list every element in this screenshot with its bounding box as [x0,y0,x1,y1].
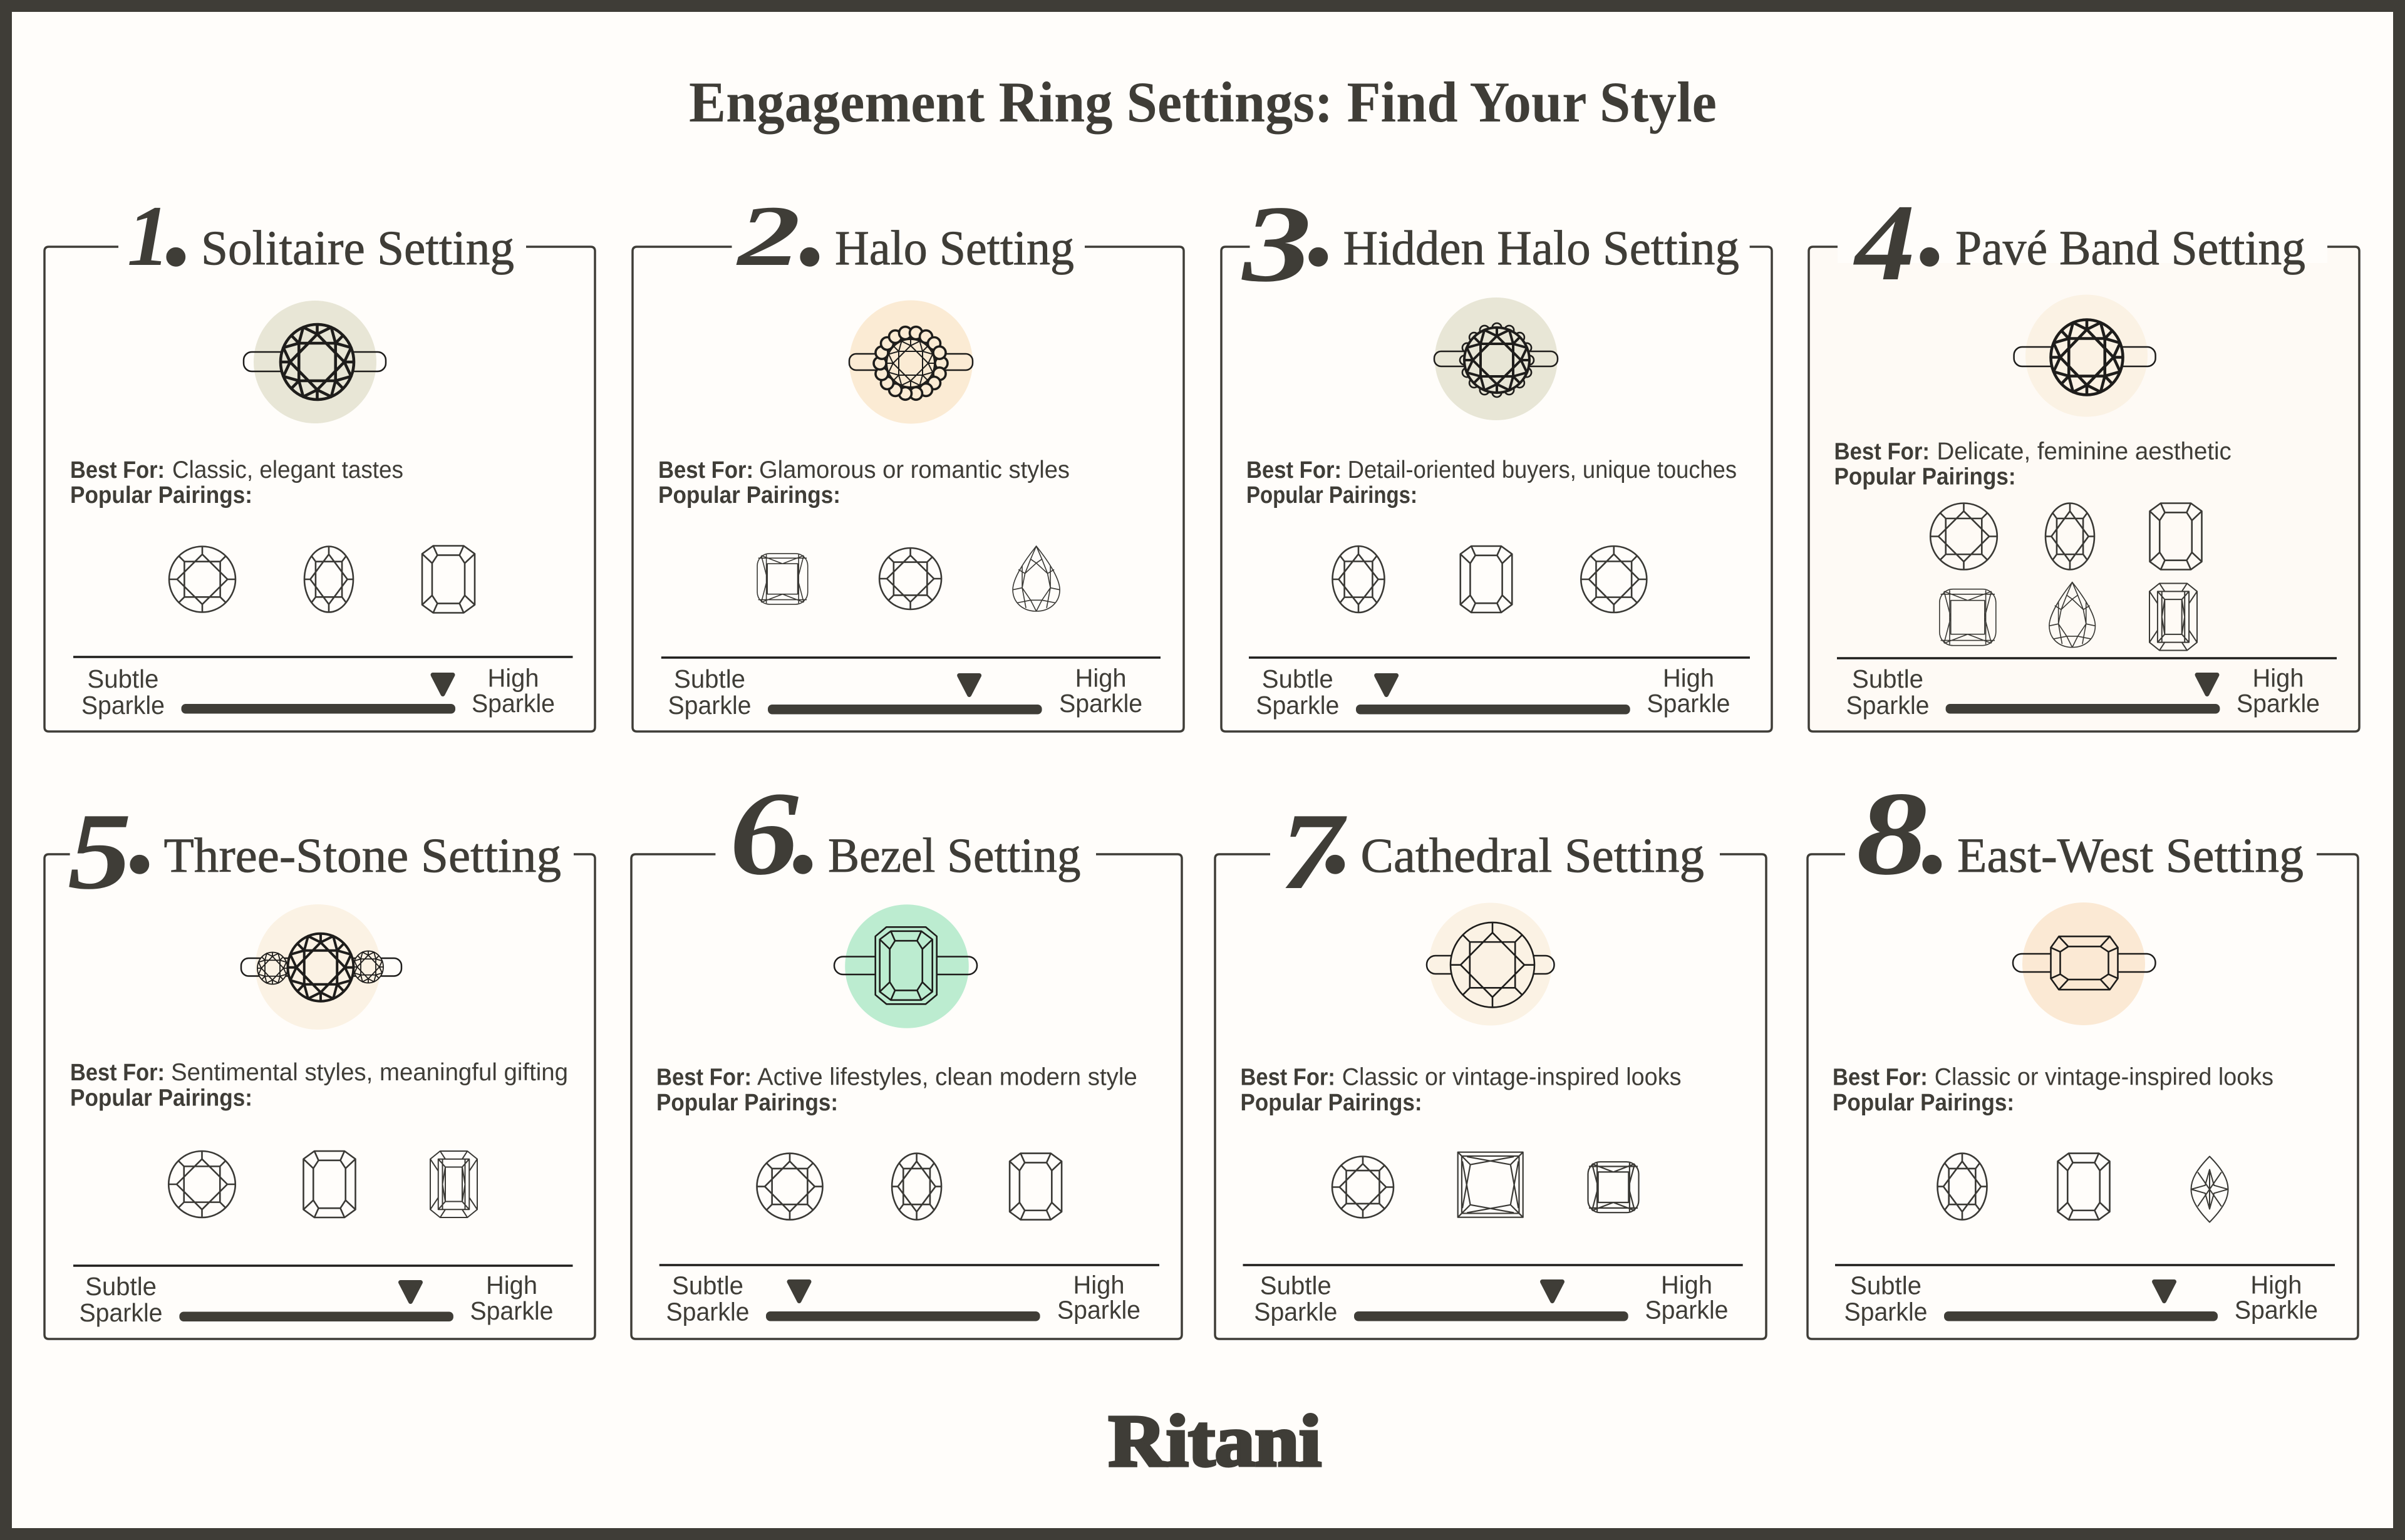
panel border [631,854,1182,1339]
sparkle scale: High [1075,664,1127,693]
number 1 [127,160,195,291]
sparkle scale: Sparkle [1256,691,1339,720]
panel border [1221,247,1772,731]
panel: bezel setting [631,767,1182,1339]
best for text: Best For: [656,1064,752,1090]
panel border [1808,854,2358,1339]
heading: Pavé Band Setting [1955,220,2305,275]
number 8 [1856,767,1952,900]
number 6: . [792,767,822,899]
best for text: Popular Pairings: [1833,1090,2014,1116]
number 6 [730,767,822,900]
best for text: Sentimental styles, meaningful gifting [171,1059,568,1086]
best for text: Detail-oriented buyers, unique touches [1348,457,1737,483]
sparkle scale: Sparkle [1645,1296,1729,1325]
best for text [1246,457,1737,509]
ring illustration [1427,903,1554,1026]
sparkle scale: Sparkle [472,689,555,718]
best for text: Popular Pairings: [70,1085,252,1111]
ring illustration [2013,902,2156,1025]
sparkle scale: Sparkle [1059,689,1142,718]
pairing icons [757,1154,1062,1220]
ring illustration [834,904,977,1028]
ring illustration [2014,294,2156,417]
best for text [656,1063,1137,1116]
sparkle scale: Sparkle [668,691,752,720]
divider [73,656,572,658]
sparkle scale: Sparkle [1254,1298,1337,1326]
number 2: 2 [736,188,800,284]
panel: solitaire setting [44,160,595,731]
panel: pave band setting [1809,160,2359,731]
sparkle scale [668,664,1142,720]
best for text: Best For: [70,1060,165,1086]
panel: east-west setting [1808,767,2358,1339]
best for text: Popular Pairings: [1240,1090,1422,1116]
best for text: Delicate, feminine aesthetic [1937,438,2232,465]
sparkle scale: High [487,664,539,693]
best for text [1834,438,2232,490]
sparkle scale [1846,664,2320,720]
number 5: 5 [68,790,132,912]
sparkle scale: Sparkle [2237,689,2320,718]
best for text: Best For: [1833,1064,1928,1090]
sparkle scale: High [2252,664,2304,693]
heading: Halo Setting [835,220,1074,275]
pairing icons [757,546,1060,611]
divider [661,656,1161,659]
number 7: . [1325,767,1354,899]
number 7: 7 [1280,790,1347,912]
best for text: Best For: [70,457,165,483]
panel border [633,247,1184,731]
sparkle scale: Subtle [1262,664,1333,693]
best for text: Popular Pairings: [1834,464,2015,490]
divider [1837,657,2337,659]
sparkle scale: Sparkle [1647,689,1730,718]
sparkle scale: Subtle [672,1271,743,1300]
best for text: Popular Pairings: [658,482,840,509]
sparkle scale: Subtle [1260,1271,1332,1300]
heading: Three-Stone Setting [164,828,561,882]
number 3 [1241,160,1338,304]
panel border [1809,247,2359,731]
ring illustration [849,301,973,423]
panel: halo setting [633,160,1184,731]
best for text: Popular Pairings: [656,1090,838,1116]
sparkle scale [1844,1270,2318,1326]
best for text: Best For: [1246,457,1342,483]
sparkle scale [1256,664,1730,720]
best for text: Best For: [1240,1064,1335,1090]
panel border [1215,854,1766,1339]
sparkle scale: High [486,1271,537,1300]
sparkle scale: Subtle [1852,664,1923,693]
sparkle scale: Sparkle [1844,1298,1928,1326]
heading: Solitaire Setting [201,220,514,275]
sparkle scale: High [1073,1270,1125,1299]
sparkle scale: Subtle [85,1272,157,1301]
sparkle scale: Sparkle [81,691,165,720]
sparkle scale: Sparkle [1846,691,1929,720]
sparkle scale: Subtle [1850,1271,1921,1300]
best for text: Classic or vintage-inspired looks [1342,1063,1681,1090]
best for text [658,457,1070,509]
number 6: 6 [730,768,799,900]
number 1: 1 [127,188,170,284]
sparkle scale [666,1270,1140,1326]
best for text [70,1059,568,1111]
sparkle scale: Sparkle [666,1298,749,1326]
sparkle scale: High [1663,664,1714,693]
number 4: 4 [1853,182,1915,303]
number 2 [736,160,829,291]
pairing icons [1930,504,2202,650]
number 8: . [1921,767,1952,899]
logo: Ritani: Ritani [1109,1400,1321,1482]
panel: cathedral setting [1215,767,1766,1339]
number 4: . [1919,160,1949,291]
pairing icons [1333,546,1647,612]
ring illustration [244,301,386,423]
sparkle scale: High [2250,1270,2302,1299]
sparkle scale: Sparkle [1057,1296,1140,1325]
panel border [44,247,595,731]
heading: East-West Setting [1957,828,2304,882]
best for text: Best For: [658,457,753,483]
number 2: . [799,160,829,291]
divider [1835,1264,2335,1266]
sparkle scale: Subtle [674,664,745,693]
divider [73,1264,572,1267]
sparkle scale: High [1661,1270,1712,1299]
ring illustration [241,904,401,1030]
heading: Hidden Halo Setting [1343,220,1739,275]
panel: hidden halo setting [1221,160,1772,731]
pairing icons [169,546,475,612]
best for text: Popular Pairings: [1246,482,1417,509]
best for text: Classic or vintage-inspired looks [1935,1063,2273,1090]
heading: Cathedral Setting [1360,828,1704,882]
sparkle scale [79,1271,554,1327]
best for text: Glamorous or romantic styles [759,457,1070,483]
sparkle scale: Sparkle [2235,1296,2318,1325]
divider [1249,656,1750,659]
title: Engagement Ring Settings: Find Your Style [689,70,1717,134]
best for text [1240,1063,1681,1116]
number 8: 8 [1856,768,1928,900]
best for text: Best For: [1834,438,1930,465]
best for text: Popular Pairings: [70,482,252,509]
heading: Bezel Setting [828,828,1081,882]
sparkle scale: Sparkle [470,1296,554,1325]
number 7 [1280,767,1354,912]
heading backdrop [1838,233,2327,263]
best for text: Active lifestyles, clean modern style [757,1063,1137,1090]
sparkle scale: Sparkle [79,1298,163,1327]
ring illustration [1434,297,1558,420]
best for text: Classic, elegant tastes [172,457,403,483]
sparkle scale [1254,1270,1729,1326]
pairing icons [168,1151,477,1217]
number 3: 3 [1241,183,1311,304]
pairing icons [1938,1154,2228,1222]
divider [659,1264,1159,1266]
number 5 [68,767,159,912]
panel border [44,854,595,1339]
number 5: . [129,767,159,899]
number 4 [1853,160,1949,303]
best for text [70,457,403,509]
sparkle scale: Subtle [87,664,158,693]
sparkle scale [81,664,555,720]
pairing icons [1332,1152,1638,1217]
number 1: . [165,160,195,291]
number 3: . [1308,160,1338,291]
divider [1243,1264,1743,1266]
best for text [1833,1063,2273,1116]
panel: three-stone setting [44,767,595,1339]
